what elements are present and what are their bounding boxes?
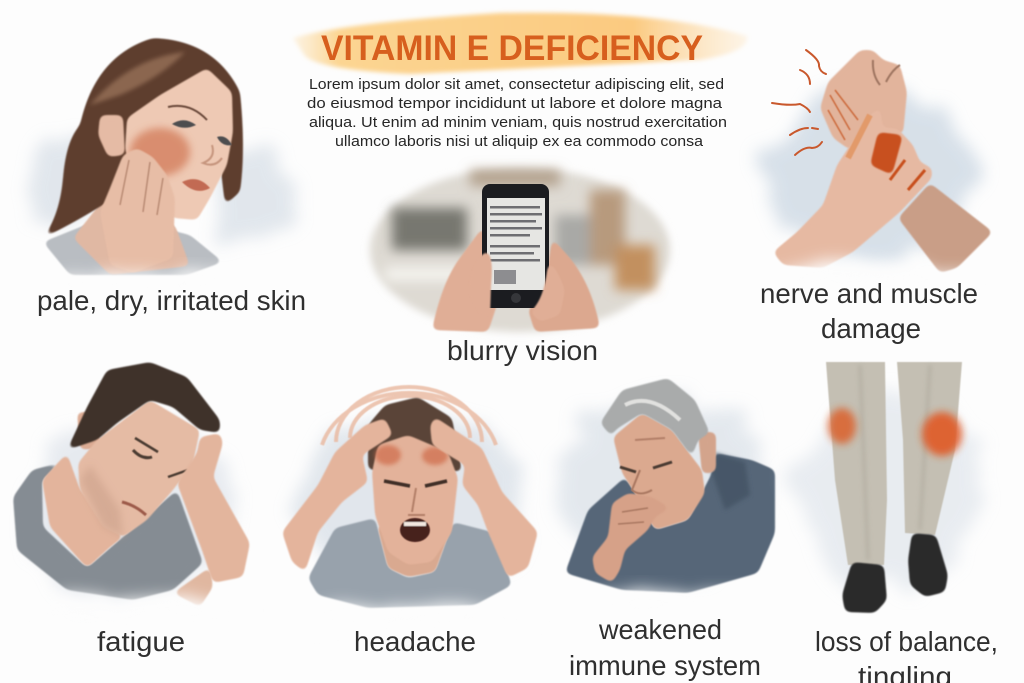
man illustration	[282, 397, 538, 608]
wrists illustration	[773, 50, 993, 273]
bottom mist	[15, 275, 255, 293]
watercolor wash	[805, 385, 975, 595]
title brush band	[293, 13, 747, 74]
watercolor wash	[25, 420, 235, 600]
panel: pale, dry, irritated skin	[15, 38, 306, 316]
panel: headache	[282, 387, 538, 657]
blurred shelves	[385, 170, 655, 290]
nerve pain marks	[772, 50, 826, 155]
label: fatigue	[97, 626, 185, 657]
label: immune system	[569, 650, 761, 681]
label: damage	[821, 313, 921, 344]
intro paragraph	[307, 76, 727, 150]
phone	[482, 184, 549, 308]
intro paragraph: ullamco laboris nisi ut aliquip ex ea commodo consa	[335, 133, 704, 150]
blurred room backdrop	[370, 168, 670, 332]
label: nerve and muscle	[760, 278, 978, 309]
panel: fatigue	[5, 362, 250, 657]
watercolor wash	[555, 390, 765, 570]
label	[760, 278, 978, 344]
title banner	[293, 13, 747, 74]
intro paragraph: do eiusmod tempor incididunt ut labore et dolore magna	[307, 95, 723, 112]
label	[815, 626, 998, 683]
label: blurry vision	[447, 335, 598, 366]
bottom mist	[5, 598, 245, 626]
label: headache	[354, 626, 476, 657]
panel: nerve and muscle damage	[750, 50, 1010, 344]
bottom mist	[550, 593, 790, 611]
bottom mist	[750, 266, 1010, 290]
older man illustration	[565, 378, 775, 593]
woman illustration	[43, 38, 243, 275]
watercolor wash	[770, 85, 970, 265]
panel: loss of balance, tingling	[805, 362, 998, 683]
legs illustration	[826, 362, 962, 613]
panel: weakened immune system	[550, 378, 790, 681]
intro paragraph: aliqua. Ut enim ad minim veniam, quis nostrud exercitation	[309, 114, 727, 131]
watercolor wash	[295, 415, 525, 585]
fingers	[468, 250, 565, 322]
title: VITAMIN E DEFICIENCY	[321, 29, 703, 68]
label	[569, 614, 761, 681]
label: pale, dry, irritated skin	[37, 285, 306, 316]
watercolor wash	[37, 130, 285, 255]
panel: blurry vision	[370, 168, 670, 366]
label: weakened	[598, 614, 722, 645]
bottom mist	[285, 606, 535, 630]
pain rings	[322, 387, 496, 445]
label: loss of balance,	[815, 626, 998, 657]
hands	[432, 228, 600, 332]
inflamed knees	[828, 408, 856, 444]
intro paragraph: Lorem ipsum dolor sit amet, consectetur adipiscing elit, sed	[309, 76, 724, 93]
man illustration	[13, 362, 250, 607]
